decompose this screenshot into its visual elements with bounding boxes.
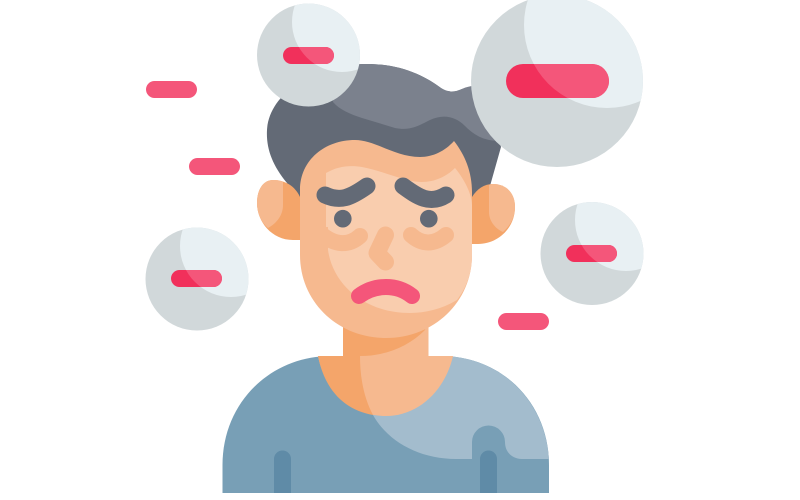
floating dash right	[498, 313, 549, 330]
neck and collar	[318, 320, 453, 416]
right eye	[420, 210, 438, 228]
left ear	[257, 180, 300, 240]
neck shadow	[318, 320, 428, 415]
neckline	[318, 356, 453, 416]
right under-eye bag	[411, 235, 446, 242]
shirt highlight	[360, 356, 549, 459]
nose	[377, 235, 386, 262]
left ear highlight	[257, 180, 283, 228]
mouth	[359, 287, 412, 296]
hair	[267, 64, 501, 215]
bubble top right	[471, 0, 643, 167]
right ear highlight	[489, 184, 515, 232]
floating dash middle left	[189, 158, 240, 175]
bubble top centre	[257, 4, 360, 106]
face highlight	[326, 166, 472, 313]
left eyebrow	[325, 186, 367, 198]
left under-eye bag	[320, 233, 360, 243]
right eyebrow	[403, 186, 446, 200]
right ear	[472, 184, 515, 244]
hair highlight	[333, 64, 500, 141]
shirt	[222, 356, 549, 493]
right arm line	[480, 450, 497, 493]
floating dash top left	[146, 81, 197, 98]
bubble left	[146, 228, 248, 330]
left arm line	[274, 450, 291, 493]
bubble right	[540, 202, 644, 305]
illustration: worried man with thought bubbles	[146, 0, 644, 493]
left eye	[334, 210, 352, 228]
face	[300, 140, 472, 338]
